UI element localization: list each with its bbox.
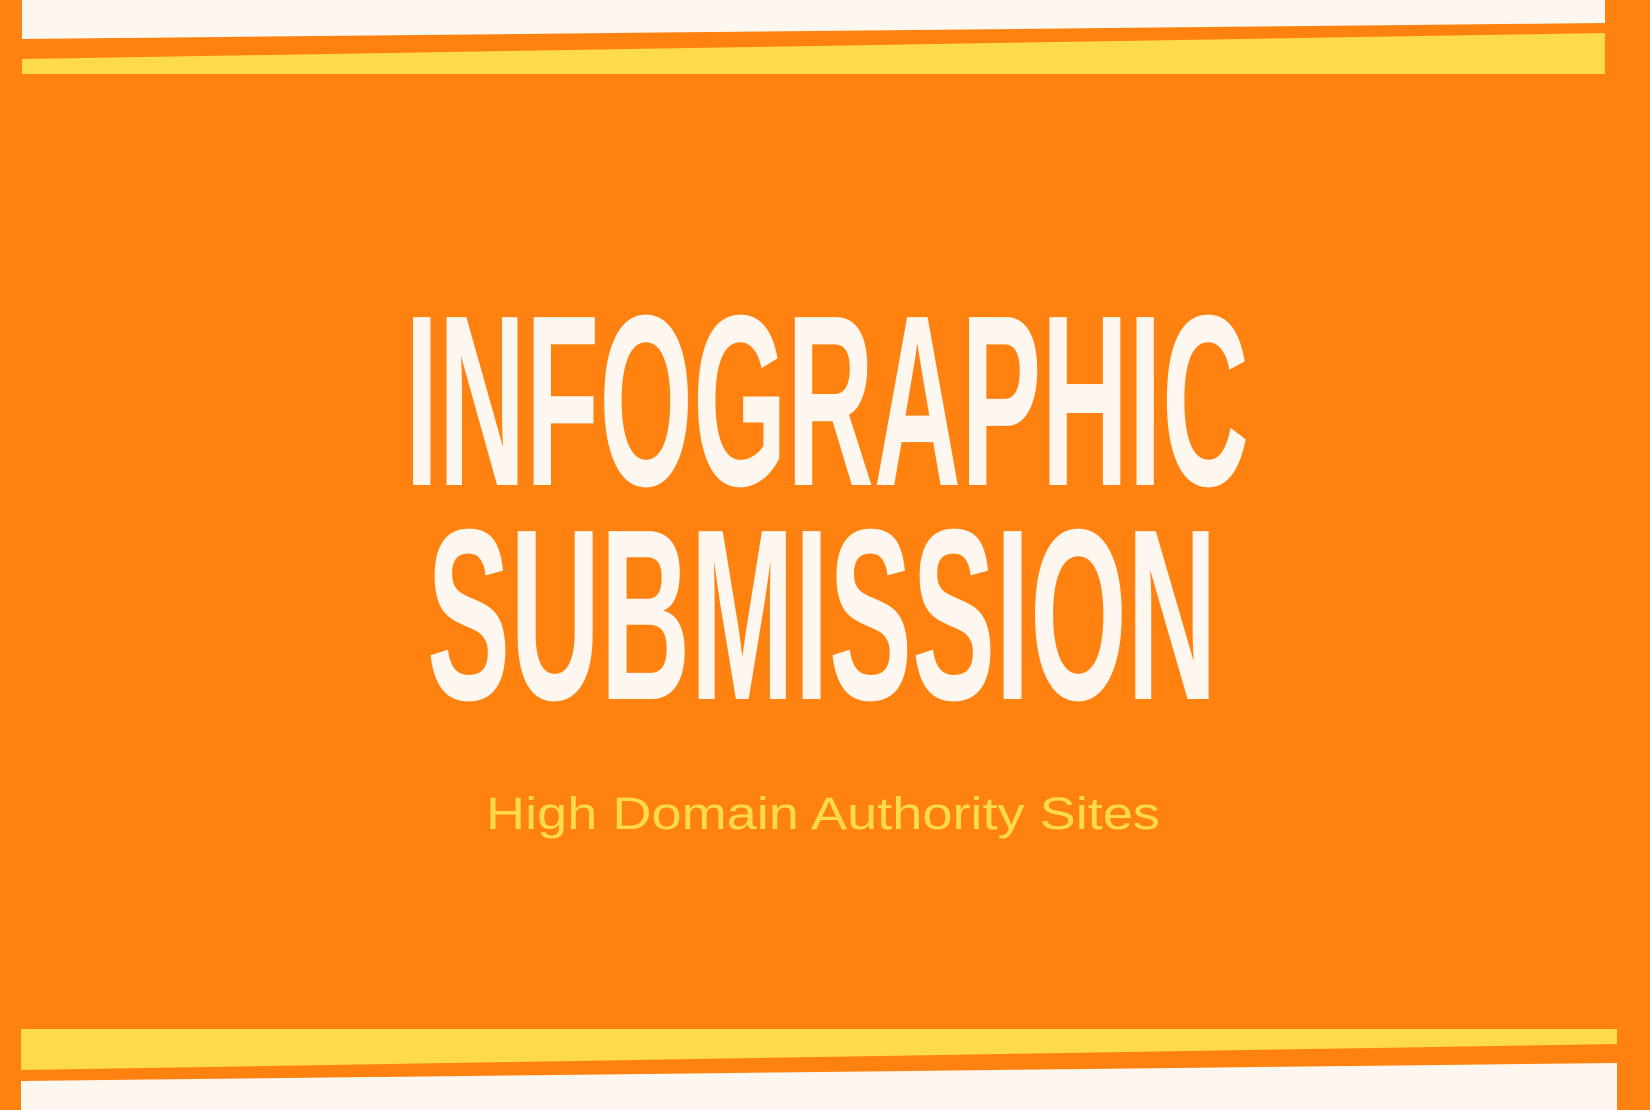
subtitle: High Domain Authority Sites bbox=[486, 788, 1160, 839]
title bbox=[405, 264, 1249, 751]
bottom yellow stripe bbox=[21, 1029, 1617, 1070]
bottom cream stripe bbox=[21, 1063, 1617, 1110]
top yellow stripe bbox=[22, 33, 1605, 74]
top cream stripe bbox=[22, 0, 1605, 39]
